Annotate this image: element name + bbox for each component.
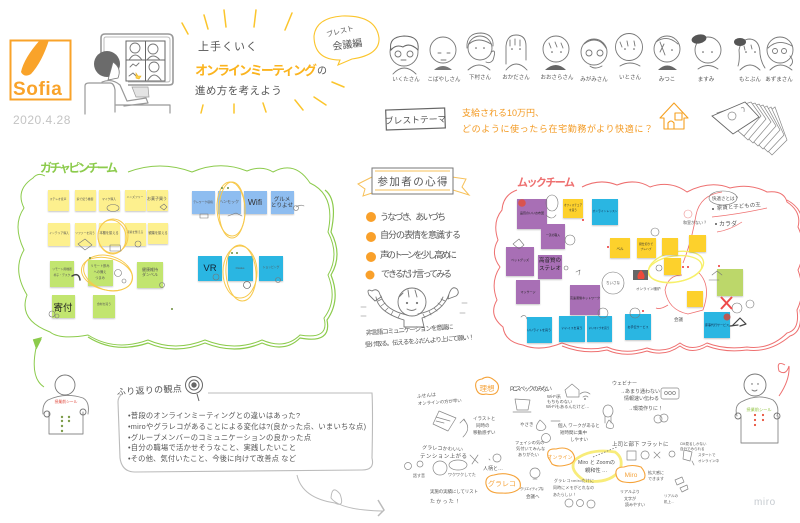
participant 4	[502, 35, 530, 81]
orange bubble: Miro: Miro	[625, 472, 638, 479]
yellow note labels: 環境を整える	[127, 230, 144, 234]
yellow sticky notes	[48, 190, 168, 246]
participant 2	[427, 37, 461, 83]
title: オンラインミーティング	[195, 63, 317, 78]
fire icon	[633, 270, 648, 280]
note texts: 文字が	[624, 495, 636, 501]
bullet text	[380, 212, 461, 279]
note texts: 話す音	[413, 472, 425, 478]
note texts: テンション上がる	[420, 452, 467, 460]
note texts: もちものない	[547, 398, 572, 405]
note texts: フェイシの気の	[515, 439, 544, 446]
note texts: スタートで	[698, 452, 716, 457]
panel: 参加者の心得	[358, 168, 475, 349]
cyan note labels: お手伝サービス	[627, 324, 649, 329]
yellow note labels: を買う	[569, 208, 577, 212]
orange bubble: グラレコ	[486, 474, 520, 493]
purple note labels: ステレオ	[539, 265, 561, 272]
yellow note labels: ステレオ音声	[50, 197, 67, 201]
note texts: 人柄と…	[483, 465, 503, 472]
yellow note labels: ソファーを買う	[75, 231, 95, 235]
participant 11: あずまさん	[765, 75, 793, 83]
yellow note labels	[49, 195, 168, 235]
panel: red team cloud	[494, 182, 800, 354]
yellow highlight blob	[573, 451, 621, 482]
green note labels: 食材を買う	[97, 302, 111, 306]
cyan sticky notes	[198, 256, 283, 281]
yellow note labels: 家で使う機器	[77, 197, 94, 201]
note texts: Miro と Zoomの	[578, 459, 615, 466]
note texts: 実施の実績にしてリスト	[430, 488, 478, 495]
dots	[89, 187, 238, 310]
title	[195, 39, 327, 97]
participant 4: おかださん	[502, 74, 530, 81]
yellow note labels: ベル	[616, 247, 624, 251]
note texts: 親和性 …	[585, 466, 607, 474]
brainstorm theme text: 支給される10万円、	[462, 107, 544, 118]
note texts: Wi-Fiもあるんだけど…	[546, 403, 589, 410]
dashed pointer	[593, 447, 617, 457]
blue note labels	[193, 195, 293, 209]
green sticky note	[717, 269, 743, 296]
blue note labels: とりよせ	[271, 202, 293, 209]
green note labels: 健康維持	[142, 266, 158, 272]
illustration: person in online meeting	[85, 34, 173, 114]
note texts: 気付いてみんな	[516, 445, 545, 452]
title rays	[182, 10, 344, 113]
panel: review points: •普段のオンラインミーティングとの違いはあった?	[128, 411, 300, 420]
bullet text: 声のトーンを少し高めに	[380, 249, 457, 260]
note texts: 自分でみられる	[680, 446, 704, 451]
green note labels: 寄付	[53, 302, 73, 314]
brainstorm theme text: どのように使ったら在宅勤務がより快適に？	[462, 123, 653, 134]
cyan note labels	[203, 263, 280, 274]
presenter: bottom left: 授業前シール	[55, 399, 78, 404]
brainstorm theme text	[462, 107, 653, 134]
blue note labels: グルメ	[274, 195, 290, 203]
blue note labels: ハンモック	[219, 198, 239, 204]
participant 8: みつこ	[659, 76, 675, 83]
heading: ガチャピンチーム: ガチャピンチーム	[40, 160, 118, 175]
yellow circles marking favourite notes	[78, 181, 258, 302]
presenter: bottom right	[735, 363, 789, 443]
note texts: 同時の	[476, 423, 490, 429]
note texts: 机上…	[664, 499, 675, 504]
note texts: ウェビナー	[612, 380, 637, 387]
side notes: 会議	[674, 316, 683, 323]
bullet text: できるだけ言ってみる	[381, 269, 452, 279]
participant 3: 下村さん	[469, 73, 491, 81]
note texts: Wi-Fi系	[547, 393, 561, 400]
yellow note labels: 観葉を揃える	[148, 230, 168, 235]
green sticky notes	[50, 260, 163, 318]
participant 7	[616, 34, 642, 81]
panel: green team cloud	[18, 166, 337, 349]
blue sticky notes	[192, 191, 294, 214]
side notes: 和室がない？	[683, 219, 707, 225]
note texts: CM見るしかない	[680, 441, 707, 446]
note text: 受け取る。伝えるをふだんより上にて願い！	[365, 332, 475, 349]
note texts: ありがたい	[518, 451, 539, 458]
note texts: オンラインの方が早い	[418, 397, 463, 407]
yellow highlight	[645, 247, 707, 287]
small sketches	[404, 384, 694, 508]
participant 1: いくたさん	[392, 76, 420, 83]
panel: review points: •グループメンバーのコミュニケーションの良かった点	[128, 433, 311, 442]
note texts: 同時にメモがとれなの	[553, 485, 594, 490]
arrow to discussion notes	[297, 475, 384, 516]
icon: magnifier	[186, 376, 202, 401]
note texts: あたらしい！	[553, 492, 576, 497]
logo: Sofia	[10, 40, 70, 100]
note texts: グラレコかわいい	[422, 444, 463, 453]
bullets	[366, 212, 376, 280]
speech bubble: ブレスト会議編: 会議編	[332, 36, 363, 53]
purple note labels: 高速通信ネットワーク	[570, 295, 600, 300]
note texts: 個人 ワークがあると	[558, 422, 600, 429]
speech bubble: ブレスト会議編	[314, 16, 379, 65]
purple note labels: 一流の職人	[546, 233, 560, 237]
cyan note labels: ショッピング	[263, 265, 280, 269]
yellow sticky notes	[563, 199, 706, 307]
miro watermark: miro	[754, 497, 776, 508]
purple note labels	[511, 210, 600, 300]
yellow note labels: プレハブ	[640, 247, 652, 251]
banner	[358, 168, 469, 196]
participant 6: みがみさん	[580, 75, 608, 83]
note texts: →環境作りに！	[628, 405, 663, 412]
note texts: 移動感ずい	[473, 429, 496, 436]
note texts: できます	[648, 476, 664, 481]
label: ブレストテーマ	[384, 108, 447, 130]
participant 1	[390, 36, 420, 83]
note texts: ふせんは	[417, 392, 436, 400]
participant 2: こばやしさん	[427, 75, 461, 83]
panel: review points	[118, 393, 373, 472]
note texts: グラレコ×miroだけに	[554, 478, 594, 483]
note texts: やさき	[520, 421, 534, 428]
note texts: 上司と部下 フラットに	[612, 440, 669, 448]
note texts: 拡大感に	[648, 469, 664, 475]
participant 11	[765, 37, 793, 83]
title: の	[317, 66, 327, 77]
bullet text: 自分の表情を意識する	[380, 229, 461, 240]
orange bubble: 理想	[476, 377, 498, 394]
yellow note labels: インテリア購入	[49, 231, 69, 235]
note texts: 情報速い伝わる	[624, 395, 659, 402]
yellow note labels	[564, 203, 653, 251]
note texts: リアルより	[620, 488, 640, 494]
green note labels: リモート用機器	[52, 267, 72, 271]
green note labels: リモート飲み	[90, 263, 110, 268]
note texts: 短時間に集中	[560, 429, 587, 436]
orange bubble: Miro	[616, 466, 645, 483]
bullet text: うなづき、あいづち	[380, 212, 446, 222]
participant 6	[580, 39, 608, 83]
side notes: 家賃と子どもの王	[716, 200, 761, 212]
note texts: イラストと	[473, 416, 495, 422]
title: 進め方を考えよう	[195, 84, 282, 97]
yellow note labels: お菓子買う	[147, 195, 167, 201]
note text	[365, 322, 475, 349]
green note labels: ダンベル	[142, 271, 158, 277]
heading: ふり返りの観点: ふり返りの観点	[117, 383, 182, 397]
presenter: bottom right: 授業前シール	[746, 406, 772, 413]
purple note labels: 高音質の	[539, 256, 561, 264]
purple note labels: マッサージ	[521, 289, 535, 294]
title: 上手くいく	[198, 39, 258, 53]
inner red outlines	[656, 192, 722, 314]
yellow note labels: マイク購入	[102, 197, 116, 201]
note texts: たかった！	[430, 498, 460, 505]
participant 10	[734, 38, 765, 83]
yellow note labels: 本棚を揃える	[99, 230, 119, 235]
speech bubble: ブレスト会議編: ブレスト	[325, 23, 355, 39]
cyan note labels	[527, 209, 729, 332]
note texts: 読みやすい	[625, 501, 645, 507]
side notes: オンライン暖炉	[636, 286, 661, 291]
note texts: しやすい	[570, 436, 588, 443]
orange bubble: オンライン: オンライン	[547, 455, 573, 461]
presenter: bottom left	[33, 338, 88, 434]
participant 7: いとさん	[619, 74, 641, 81]
side notes	[636, 195, 767, 323]
note texts: PCスペックのみない	[510, 386, 552, 393]
panel: review points: •その他、気付いたこと、今後に向けて改善点 など	[128, 454, 297, 463]
cyan sticky notes	[527, 199, 730, 343]
orange bubble: オンライン	[547, 448, 575, 466]
cyan note labels: いいマイクを買う	[589, 326, 610, 330]
orange bubble: 理想: 理想	[480, 383, 495, 393]
purple sticky notes	[506, 199, 600, 315]
participant 5	[540, 36, 574, 81]
banner: 参加者の心得	[378, 176, 448, 188]
blue note labels: テレワーク環境	[193, 200, 213, 204]
note texts: ワクワクしてた	[448, 471, 476, 477]
green note labels: つまみ	[95, 275, 106, 280]
cyan note labels: VR	[203, 263, 217, 274]
green note labels	[52, 263, 158, 314]
heading: ムックチーム: ムックチーム	[517, 176, 575, 189]
participant 3	[467, 33, 495, 81]
panel: review points: •miroやグラレコがあることによる変化は?(良かった点、いまいちな点)	[128, 422, 366, 431]
cyan note labels: いいイスを買う	[562, 325, 582, 330]
side notes: カラダ	[719, 220, 737, 228]
note texts: オンライン中	[698, 458, 719, 463]
cyan note labels: いいライトを買う	[527, 327, 551, 332]
note texts: →あまり通わない	[620, 388, 660, 395]
yellow note labels: ハンズフリー	[127, 195, 144, 199]
yellow note labels: オフィスチェア	[564, 203, 582, 207]
cyan note labels: 家事代行サービス	[705, 322, 729, 327]
green note labels: 椅子・デスク	[54, 273, 71, 277]
green note labels: への備え	[94, 269, 106, 274]
participant 9: ますみ	[698, 76, 715, 83]
purple note labels: ペットグッズ	[511, 257, 529, 262]
label: ブレストテーマ: ブレストテーマ	[385, 113, 447, 126]
yellow note labels: 間仕切りで	[639, 242, 653, 246]
note texts: 会議へ	[526, 493, 540, 500]
purple note labels: 品質のいいお布団	[520, 210, 544, 215]
note texts	[413, 380, 719, 507]
icon: stack of bills	[712, 102, 787, 155]
participants row	[390, 33, 793, 83]
participant 8	[654, 36, 680, 83]
panel: discussion graphic notes	[404, 377, 719, 508]
small sketches around notes	[49, 204, 304, 318]
cyan note labels: オンラインレッスン	[592, 209, 618, 213]
panel: review points: •自分の職場で活かせそうなこと、実践したいこと	[128, 443, 296, 452]
red marks: X and dots	[518, 199, 732, 320]
side notes: 快適さとは？	[712, 195, 739, 202]
sketches around notes: ちいさな	[606, 280, 620, 285]
blue note labels: Wifi	[248, 197, 262, 207]
note texts: リアルの	[664, 493, 678, 498]
participant 10: もとぶん	[739, 76, 761, 83]
icon: house	[660, 103, 688, 129]
orange bubble: グラレコ: グラレコ	[488, 479, 516, 488]
sketches around notes	[513, 191, 754, 326]
note text: 非言語コミュニケーションを意識に	[366, 322, 454, 337]
participant 9	[691, 33, 721, 83]
cyan note labels: Oculus	[236, 266, 245, 270]
note texts: クリエイティブな	[520, 486, 544, 491]
illustration: cheering person	[361, 288, 467, 327]
date: 2020.4.28	[13, 113, 71, 127]
logo: Sofia: Sofia	[13, 79, 62, 100]
participant 5: おおさらさん	[540, 74, 574, 81]
